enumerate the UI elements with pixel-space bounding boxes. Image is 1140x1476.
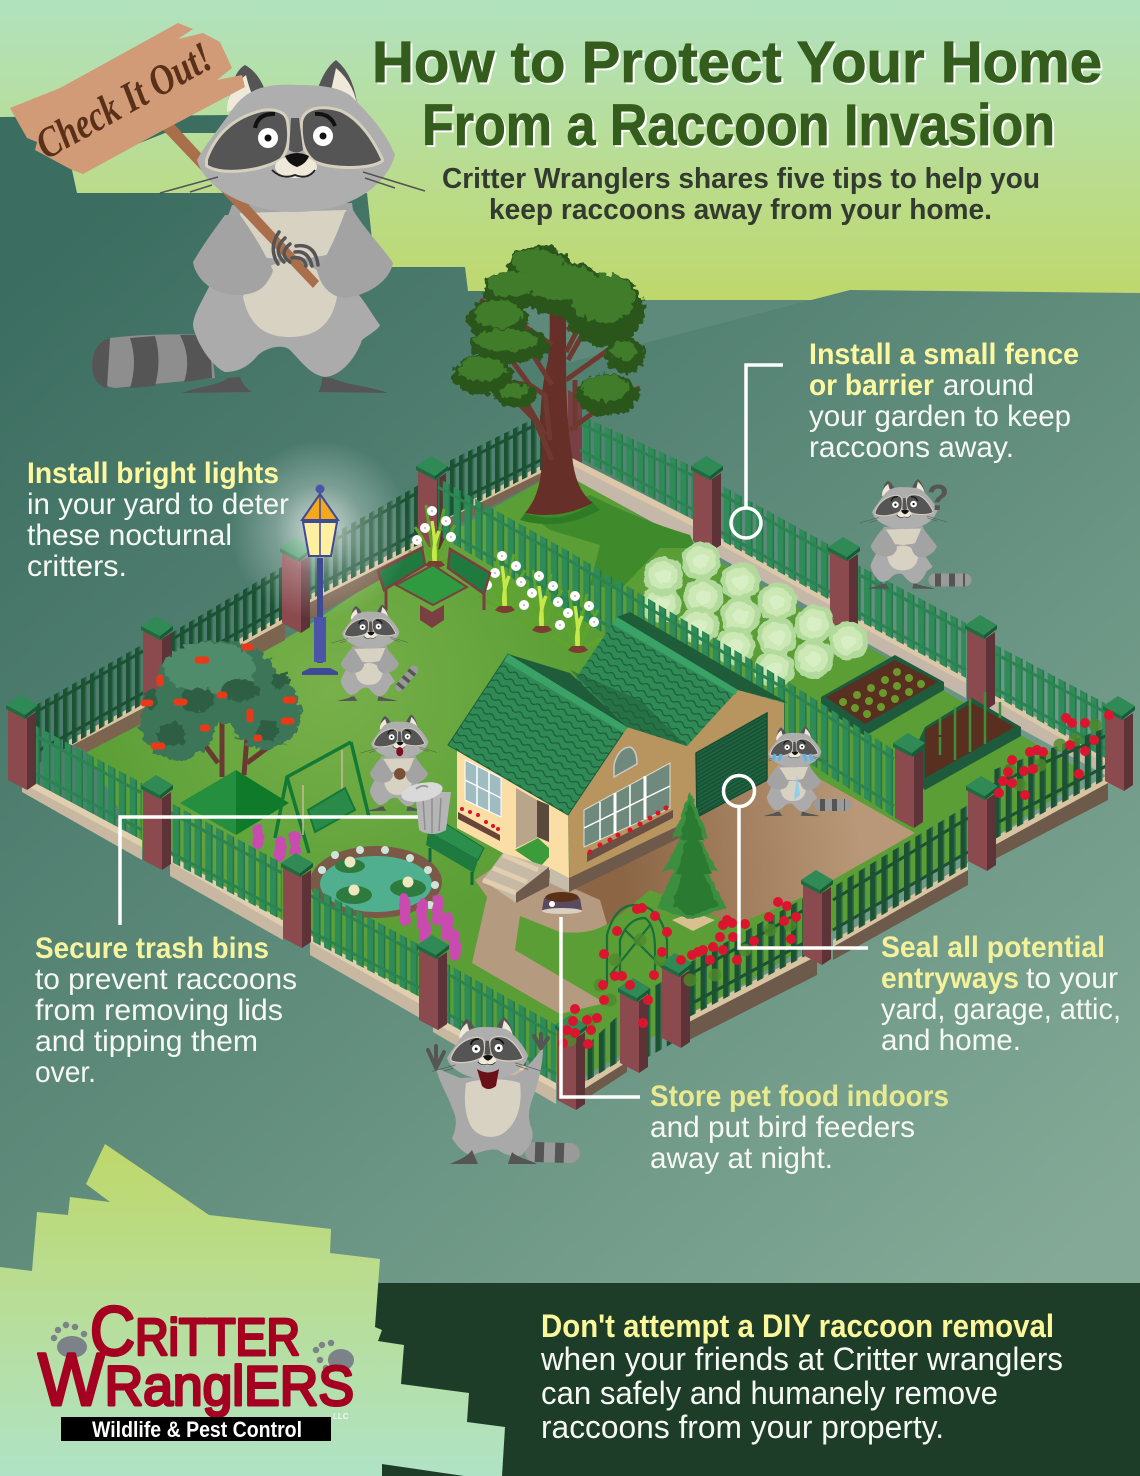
- doormat: [515, 838, 549, 867]
- callout: entryways tip: to your: [1026, 962, 1118, 995]
- company logo: LLC: [333, 1412, 349, 1421]
- fence posts: [6, 695, 1135, 1110]
- arched window: [614, 747, 637, 777]
- footer dark band: [360, 1283, 1140, 1476]
- callout: pet food tip: away at night.: [650, 1142, 833, 1175]
- wooden sign: Check It Out!: [28, 34, 221, 169]
- vegetable bed: seedlings: [821, 655, 944, 736]
- pink flowers: [258, 830, 455, 955]
- sign stick: [163, 124, 319, 288]
- callout leader: pet food: [561, 917, 640, 1097]
- window flower box: [587, 808, 673, 862]
- confused raccoon with question mark: [860, 477, 965, 589]
- driveway: [570, 762, 915, 925]
- footer message: Don't attempt a DIY raccoon removal: [541, 1308, 1054, 1344]
- logo wordmark: CRiTTER: [90, 1292, 300, 1370]
- paw prints: [54, 1325, 354, 1371]
- sky background: [0, 0, 1140, 300]
- title: [372, 30, 1102, 158]
- front left fence: [22, 720, 556, 1104]
- callout: pet food tip: and put bird feeders: [650, 1111, 915, 1144]
- callout: lights tip: [27, 457, 289, 583]
- isometric yard illustration: [6, 246, 1135, 1110]
- callout: fence tip: around: [943, 369, 1034, 402]
- lamp post with glow: [230, 440, 410, 675]
- callout leader: trash bins: [120, 817, 418, 925]
- lawn ground: [87, 470, 1090, 1085]
- callout: trash tip: and tipping them: [35, 1025, 258, 1058]
- rear roof: [570, 612, 788, 746]
- subtitle: Critter Wranglers shares five tips to help you: [442, 163, 1040, 195]
- garden flowers: lilies: [409, 505, 604, 653]
- callout: lights tip: in your yard to deter: [27, 488, 289, 521]
- inner garden fence: [438, 478, 894, 817]
- callout: fence tip: your garden to keep: [809, 400, 1071, 433]
- callout: entryways tip: and home.: [881, 1024, 1021, 1057]
- roof valley: [508, 654, 627, 727]
- logo wordmark: [38, 1292, 354, 1421]
- climbing vines: [570, 725, 1095, 1040]
- logo wordmark: WRanglERS: [38, 1338, 354, 1421]
- subtitle: keep raccoons away from your home.: [489, 194, 992, 226]
- pet food bowl: [542, 892, 582, 914]
- front window: [465, 760, 501, 817]
- back left posts: [141, 456, 448, 711]
- title: How to Protect Your Home: [372, 30, 1102, 95]
- callout: entryways tip: [881, 931, 1121, 1057]
- house: [448, 612, 788, 903]
- confused raccoon with question mark: ?: [927, 477, 949, 518]
- callout: trash tip: Secure trash bins: [35, 932, 269, 965]
- callout: lights tip: Install bright lights: [27, 457, 279, 490]
- callout: pet food tip: Store pet food indoors: [650, 1080, 949, 1113]
- steps: [483, 853, 549, 903]
- front roof: [448, 654, 627, 815]
- garden bench: [426, 815, 484, 885]
- callout: lights tip: these nocturnal: [27, 519, 232, 552]
- arch with roses: [607, 905, 667, 985]
- callout: fence tip: [809, 338, 1079, 464]
- red roses: [563, 715, 1109, 1044]
- callout: trash tip: to prevent raccoons: [35, 963, 297, 996]
- cabbages: [642, 541, 868, 688]
- raccoon eating near the trash can: [360, 714, 437, 811]
- company logo: [38, 1292, 354, 1442]
- flower box: [458, 809, 500, 841]
- callout leader: fence: [731, 365, 783, 538]
- raccoon by the lamp: [331, 604, 414, 701]
- pond: [310, 846, 442, 918]
- footer message: can safely and humanely remove: [541, 1375, 998, 1411]
- raccoon paws: [273, 232, 318, 266]
- callout: pet food tip: [650, 1080, 949, 1175]
- tan side wall: [568, 690, 784, 892]
- callout: fence tip: Install a small fence: [809, 338, 1079, 371]
- callout: entryways tip: yard, garage, attic,: [881, 993, 1121, 1026]
- callout: trash tip: from removing lids: [35, 994, 283, 1027]
- trash bin with lid: [400, 779, 451, 834]
- raccoon tail: [92, 334, 215, 388]
- callout leader: entryways: [724, 776, 868, 948]
- rowan tree with berries: [140, 640, 301, 777]
- door recess: [516, 788, 549, 848]
- fir tree: [657, 792, 727, 931]
- gazebo roof: [180, 770, 289, 835]
- callout: trash tip: over.: [35, 1056, 96, 1089]
- company logo: Wildlife & Pest Control: [92, 1417, 302, 1442]
- callout: fence tip: or barrier: [809, 369, 934, 402]
- subtitle: [442, 163, 1040, 226]
- big window: [584, 763, 670, 847]
- tree shadow on lawn: [530, 495, 696, 590]
- callout: fence tip: raccoons away.: [809, 431, 1014, 464]
- picnic table and benches: [378, 548, 490, 628]
- callout: entryways tip: Seal all potential: [881, 931, 1105, 964]
- big raccoon holding sign: [10, 23, 425, 393]
- callout: entryways tip: entryways: [881, 962, 1019, 995]
- footer message: raccoons from your property.: [541, 1409, 944, 1445]
- logo tagline bar: [61, 1417, 331, 1441]
- footer message: [540, 1308, 1063, 1445]
- callout: trash tip: [35, 932, 297, 1089]
- back right walls and fences: [568, 390, 1105, 775]
- cream front wall: [457, 750, 569, 878]
- excited raccoon at bottom: [428, 1017, 570, 1164]
- front right fence: [584, 727, 1108, 1100]
- footer light torn panel: [0, 1144, 505, 1476]
- back right posts: [691, 456, 997, 710]
- garage door: [696, 713, 767, 817]
- swing: [275, 742, 369, 853]
- callout: lights tip: critters.: [27, 550, 127, 583]
- title: From a Raccoon Invasion: [422, 93, 1055, 158]
- footer message: when your friends at Critter wranglers: [540, 1341, 1063, 1377]
- back left walls and fences: [36, 413, 545, 765]
- crying raccoon: [758, 726, 845, 816]
- vegetable bed: onions: [905, 692, 1021, 790]
- front path: [472, 860, 607, 1014]
- big oak tree: [453, 246, 645, 524]
